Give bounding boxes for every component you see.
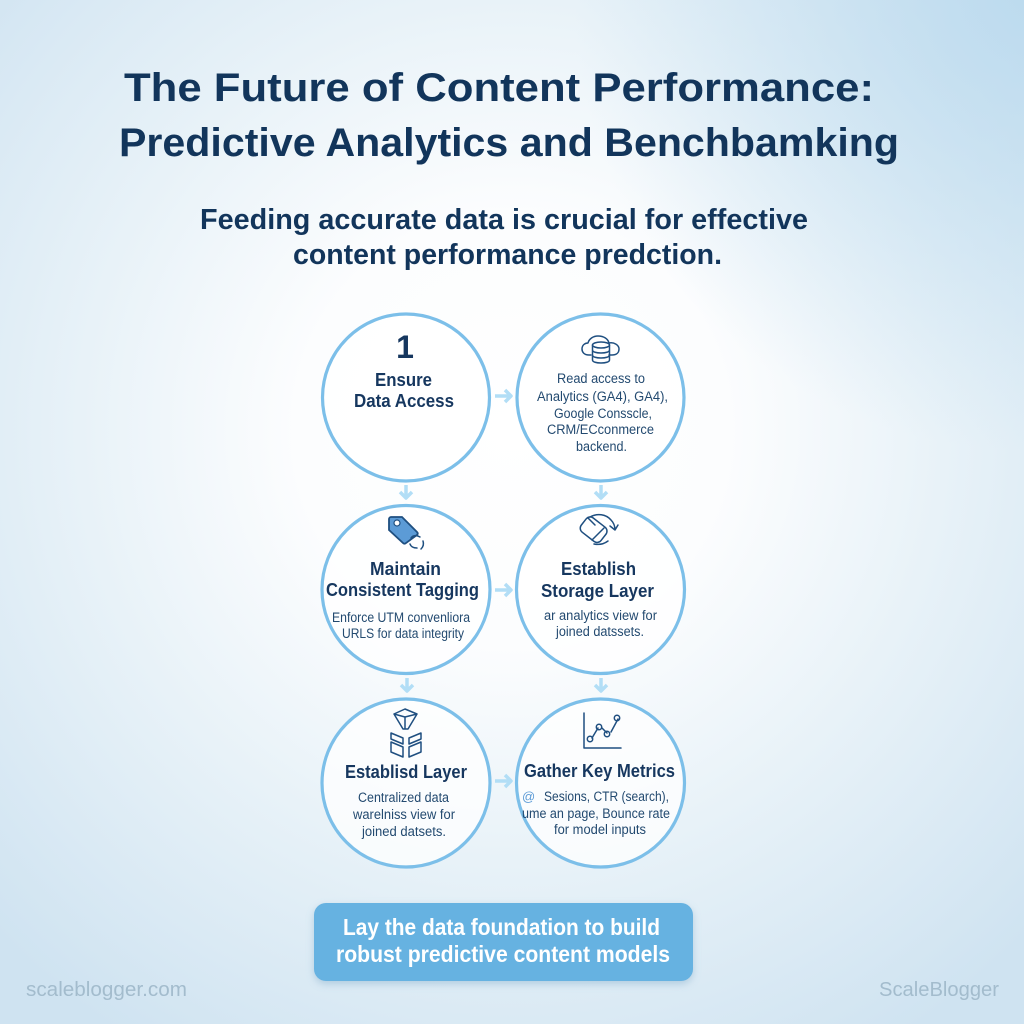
icon: cloud database: [582, 336, 619, 363]
text: read access: Analytics (GA4), GA4),: [537, 389, 668, 404]
arrow: column 2 down 2: [595, 678, 607, 691]
arrow: row 3 right: [495, 775, 511, 787]
text: centralized data: Centralized data: [358, 790, 449, 805]
panel: maintain consistent tagging: [322, 506, 490, 674]
icon: funnel over boxes: [391, 709, 421, 757]
heading: maintain consistent tagging: Consistent Tagging: [326, 579, 479, 600]
text: enforce utm: [332, 610, 470, 641]
callout: [314, 903, 693, 981]
text: read access: Google Consscle,: [554, 406, 652, 421]
icon: line chart: [584, 713, 621, 748]
subtitle: content performance predction.: [293, 239, 722, 271]
heading: ensure data access: [354, 369, 454, 411]
panel: establish storage layer: [516, 506, 684, 674]
panel: established layer: [322, 699, 490, 867]
text: sessions ctr: ume an page, Bounce rate: [522, 806, 670, 821]
heading: establisd layer: Establisd Layer: [345, 761, 467, 782]
text: centralized data: [352, 790, 455, 839]
text: read access: CRM/ECconmerce: [547, 422, 654, 437]
heading: ensure data access: Data Access: [354, 390, 454, 411]
text: analytics view: joined datssets.: [555, 624, 644, 639]
panel: step 1 ensure data access: [322, 314, 490, 481]
title: [119, 66, 899, 165]
text: read access: backend.: [576, 439, 627, 454]
footer: website: scaleblogger.com: [26, 979, 187, 1001]
text: analytics view: ar analytics view for: [544, 608, 657, 623]
heading: maintain consistent tagging: [326, 558, 479, 600]
panel: gather key metrics: [516, 699, 684, 867]
callout: Lay the data foundation to build: [343, 914, 660, 940]
title: The Future of Content Performance:: [124, 66, 874, 110]
arrow: row 1 right: [495, 390, 511, 402]
text: read access: [537, 371, 668, 454]
text: read access: Read access to: [557, 371, 645, 386]
arrow: column 1 down 1: [400, 485, 412, 498]
icon: tag: [389, 517, 423, 549]
callout: robust predictive content models: [336, 941, 670, 967]
subtitle: [200, 204, 808, 271]
panel: read access: [517, 314, 684, 481]
text: sessions ctr: @: [522, 789, 535, 804]
step number: 1: [396, 329, 414, 365]
text: sessions ctr: for model inputs: [554, 822, 646, 837]
arrow: column 1 down 2: [401, 678, 413, 691]
arrow: row 2 right: [495, 584, 511, 596]
text: sessions ctr: [522, 789, 670, 837]
icon: storage cycle: [578, 515, 618, 544]
arrow: column 2 down 1: [595, 485, 607, 498]
text: enforce utm: URLS for data integrity: [342, 626, 464, 641]
heading: establish storage layer: Storage Layer: [541, 580, 654, 601]
text: centralized data: joined datsets.: [361, 824, 446, 839]
text: sessions ctr: Sesions, CTR (search),: [544, 789, 669, 804]
heading: ensure data access: Ensure: [375, 369, 432, 390]
text: centralized data: warelniss view for: [352, 807, 455, 822]
heading: maintain consistent tagging: Maintain: [370, 558, 441, 579]
heading: establish storage layer: [541, 558, 654, 601]
text: enforce utm: Enforce UTM convenliora: [332, 610, 470, 625]
subtitle: Feeding accurate data is crucial for effective: [200, 204, 808, 236]
heading: establish storage layer: Establish: [561, 558, 636, 579]
title: Predictive Analytics and Benchbamking: [119, 121, 899, 165]
text: analytics view: [544, 608, 657, 639]
footer: brand: ScaleBlogger: [879, 979, 999, 1001]
heading: gather key metrics: Gather Key Metrics: [524, 760, 675, 781]
